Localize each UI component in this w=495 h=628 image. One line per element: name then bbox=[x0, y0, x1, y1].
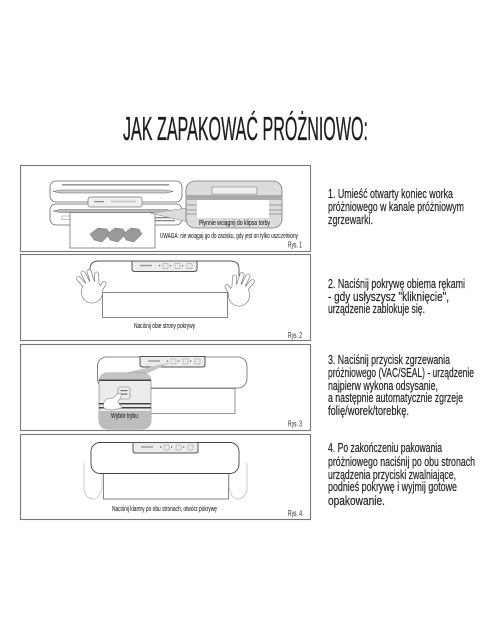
callout label: Płynnie wciągnij do klipsa torby bbox=[199, 218, 270, 227]
callout label: Wybór trybu bbox=[111, 411, 138, 420]
icon: left hand bbox=[78, 272, 104, 301]
caption: Naciśnij klamry po obu stronach, otwórz pokrywę bbox=[112, 504, 217, 513]
vacuum bag bbox=[102, 292, 228, 318]
text block: step 3: folię/worek/torebkę. bbox=[328, 404, 409, 418]
text block: step 4: 4. Po zakończeniu pakowania bbox=[328, 441, 442, 455]
text block: step 4 bbox=[328, 441, 475, 508]
callout: mode selection bbox=[99, 363, 170, 429]
figure label 3: Rys. 3 bbox=[288, 420, 302, 428]
text block: step 4: opakowanie. bbox=[328, 494, 385, 508]
vacuum bag bbox=[70, 212, 155, 248]
figure label 1: Rys. 1 bbox=[288, 240, 302, 250]
text block: step 3: najpierw wykona odsysanie, bbox=[328, 379, 438, 393]
panel: figure 3 bbox=[20, 344, 310, 430]
text block: step 1: zgrzewarki. bbox=[328, 213, 373, 227]
callout: magnified clip bbox=[150, 181, 282, 228]
text block: step 2: urządzenie zablokuje się. bbox=[328, 302, 425, 316]
icon: left hand on release bbox=[84, 463, 102, 499]
icon: sealer lid bbox=[90, 261, 239, 276]
figure label 4: Rys. 4 bbox=[288, 509, 302, 518]
icon: food portions bbox=[90, 228, 142, 242]
panel: figure 4 bbox=[20, 434, 310, 520]
text block: step 3 bbox=[328, 353, 474, 418]
icon: sealer base bbox=[50, 204, 182, 225]
text block: step 2 bbox=[328, 277, 465, 316]
figure label 2: Rys. 2 bbox=[288, 331, 302, 340]
vacuum bag bbox=[104, 470, 228, 499]
icon: open vacuum sealer lid bbox=[50, 181, 182, 202]
icon: right hand on release bbox=[229, 463, 247, 499]
panel: figure 2 bbox=[20, 254, 310, 340]
vacuum bag bbox=[150, 388, 235, 414]
icon: pressing finger bbox=[103, 393, 122, 410]
caption: Naciśnij obie strony pokrywy bbox=[134, 321, 195, 330]
icon: sealer bbox=[98, 356, 247, 388]
note: UWAGA: nie wciągaj go do zacisku, gdy jest on tylko uszczelniony bbox=[160, 231, 298, 240]
icon: right hand bbox=[227, 274, 252, 304]
control strip bbox=[88, 197, 142, 207]
text block: step 1 bbox=[328, 187, 464, 227]
text block: step 2: - gdy usłyszysz "kliknięcie", bbox=[328, 290, 449, 304]
icon: sealer bbox=[91, 442, 239, 474]
panel: figure 1 bbox=[20, 166, 310, 252]
